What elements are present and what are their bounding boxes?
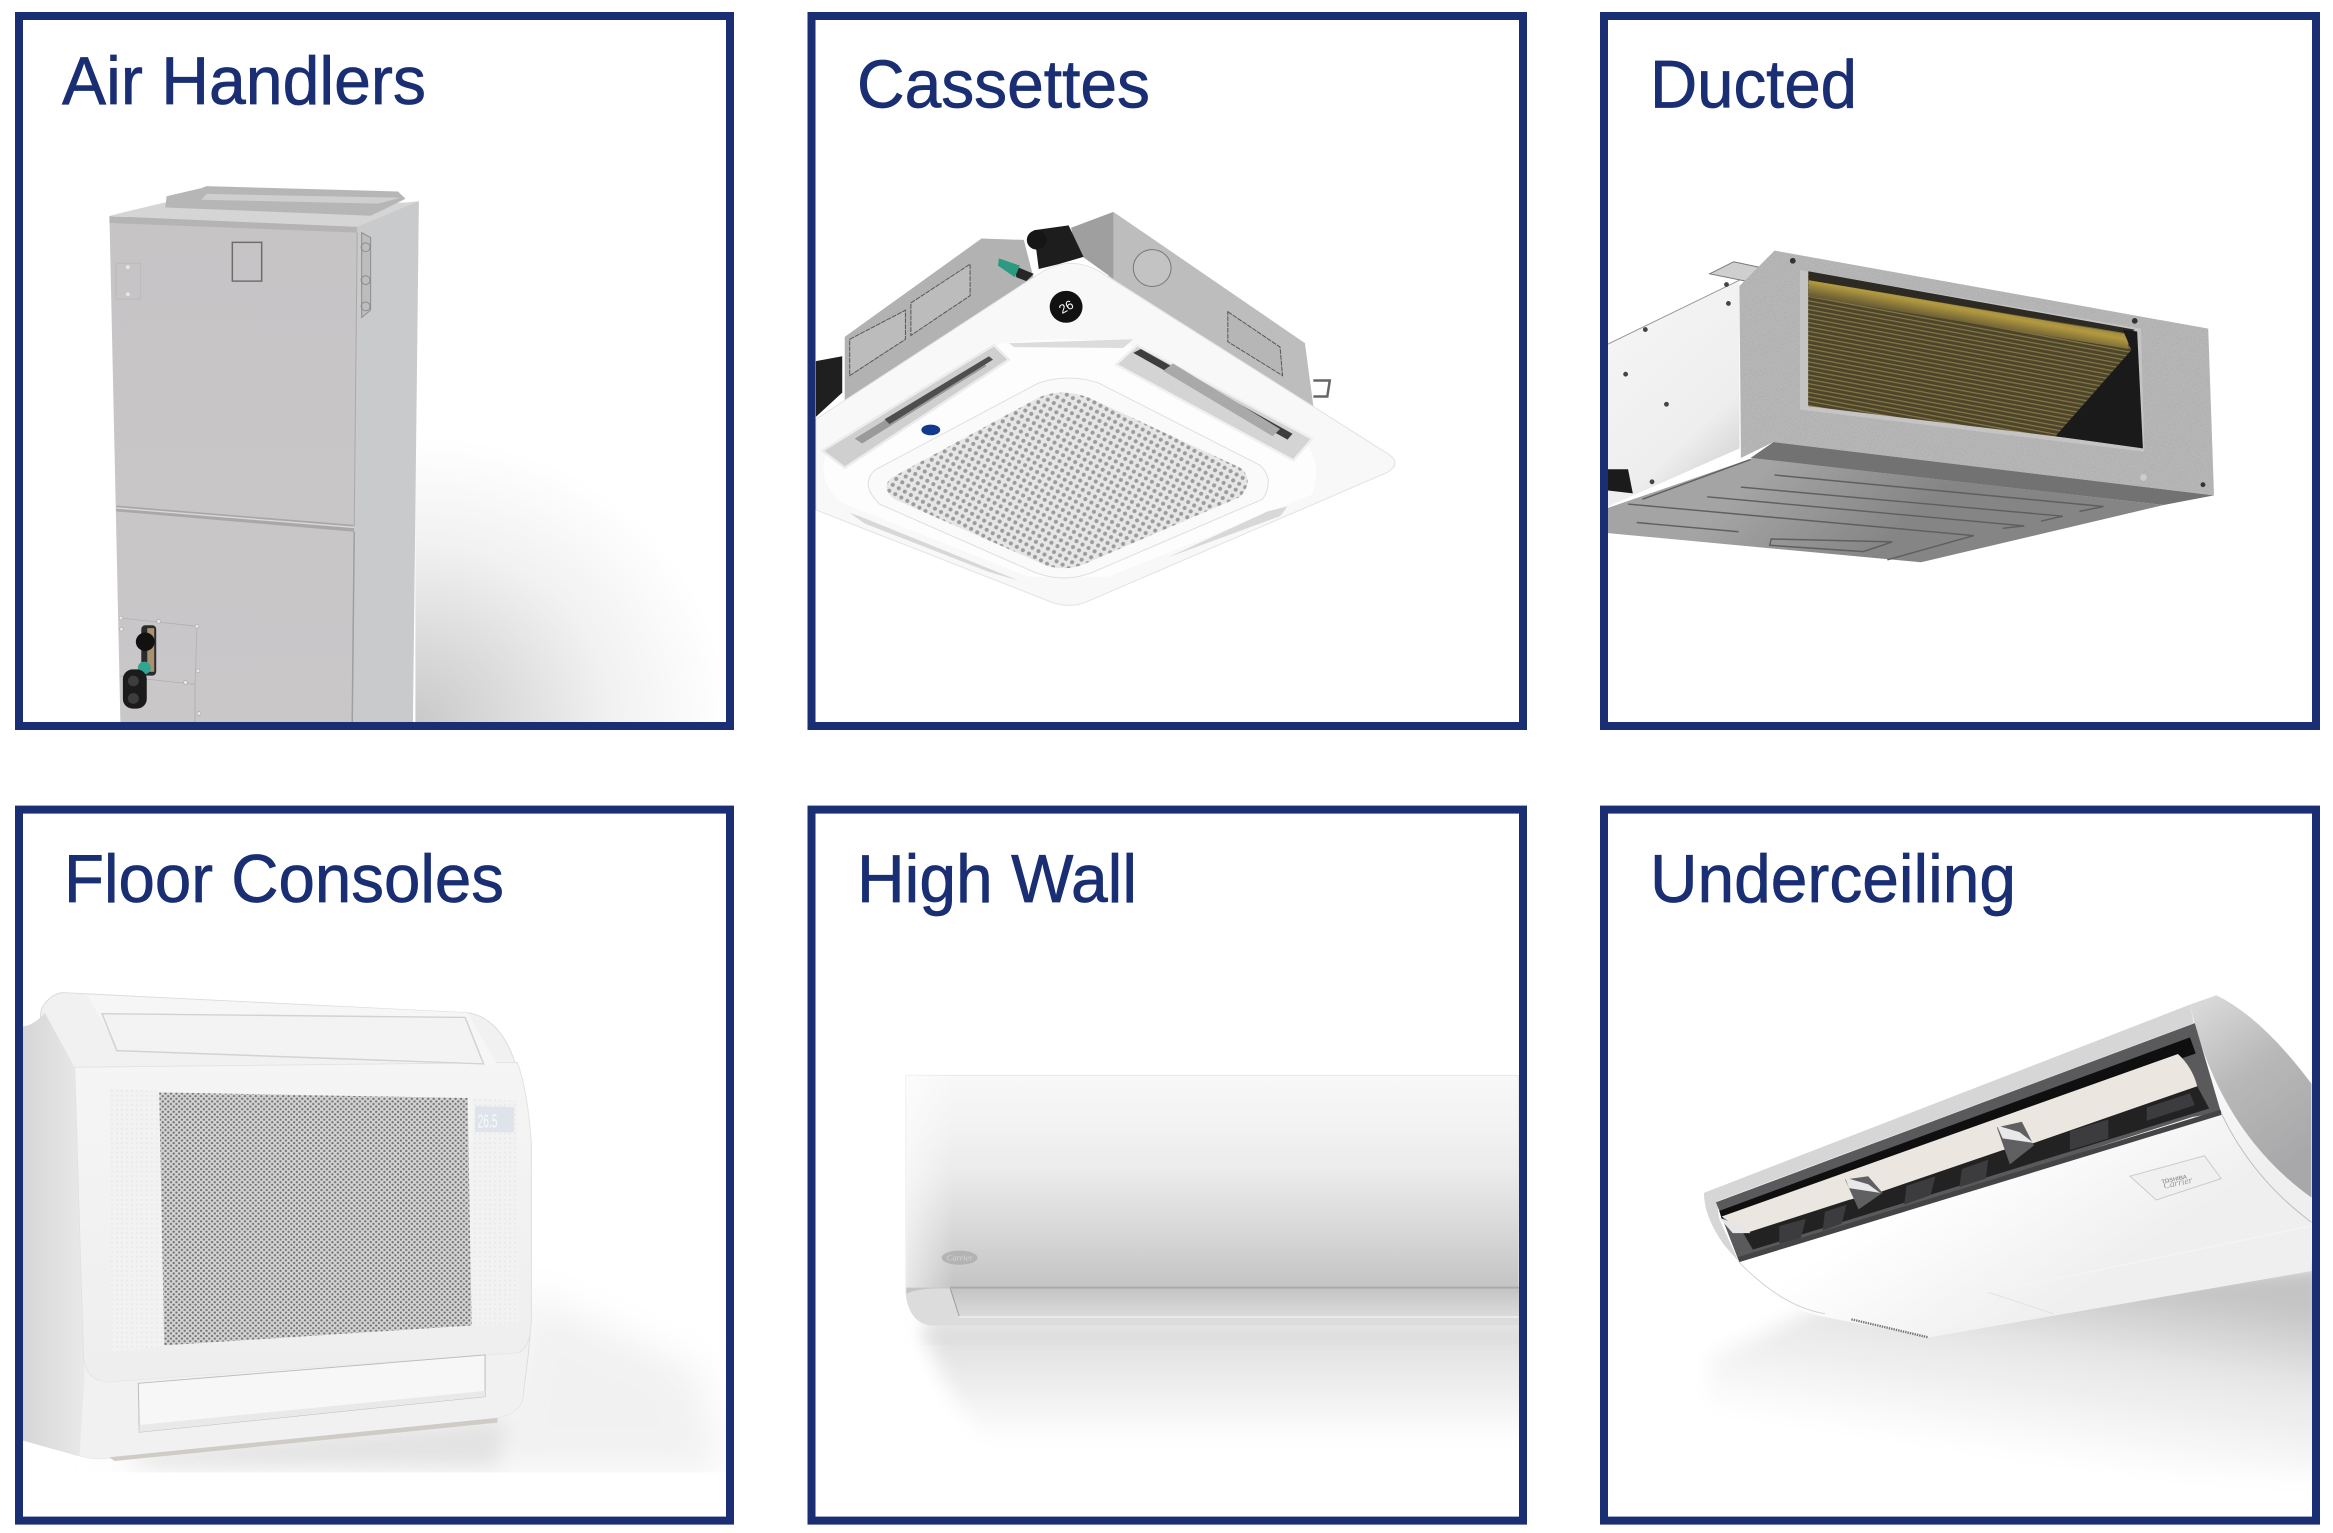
panel: High Wall	[812, 810, 1536, 1521]
illustration: high wall unit: Carrier	[947, 1254, 973, 1263]
illustration: ducted unit	[1608, 251, 2214, 562]
panel: Cassettes	[812, 16, 1523, 726]
heading: Underceiling	[1650, 841, 2016, 917]
heading: Floor Consoles	[64, 841, 504, 917]
illustration: underceiling unit	[1704, 995, 2329, 1477]
panel frame	[1604, 810, 2316, 1521]
panel frame	[1604, 16, 2316, 726]
illustration: underceiling unit: TOSHIBA	[2161, 1174, 2188, 1186]
panel frame	[812, 810, 1523, 1521]
illustration: air handler unit	[109, 186, 660, 722]
heading: Ducted	[1650, 46, 1857, 122]
heading: Cassettes	[857, 46, 1150, 122]
illustration: floor console unit: 26.5	[478, 1111, 498, 1131]
illustration: ceiling cassette unit	[816, 212, 1395, 605]
illustration: high wall unit	[906, 1075, 1536, 1439]
illustration: floor console unit	[23, 992, 711, 1472]
panel: Underceiling	[1604, 810, 2329, 1521]
panel frame	[19, 810, 730, 1521]
panel: Air Handlers	[19, 16, 730, 726]
panel frame	[19, 16, 730, 726]
panel frame	[812, 16, 1523, 726]
illustration: underceiling unit: Carrier	[2162, 1175, 2194, 1192]
heading: High Wall	[857, 841, 1137, 917]
panel: Ducted	[1604, 16, 2316, 726]
panel: Floor Consoles	[0, 810, 746, 1533]
heading: Air Handlers	[62, 43, 426, 119]
illustration: ceiling cassette unit: 26	[1056, 297, 1076, 317]
